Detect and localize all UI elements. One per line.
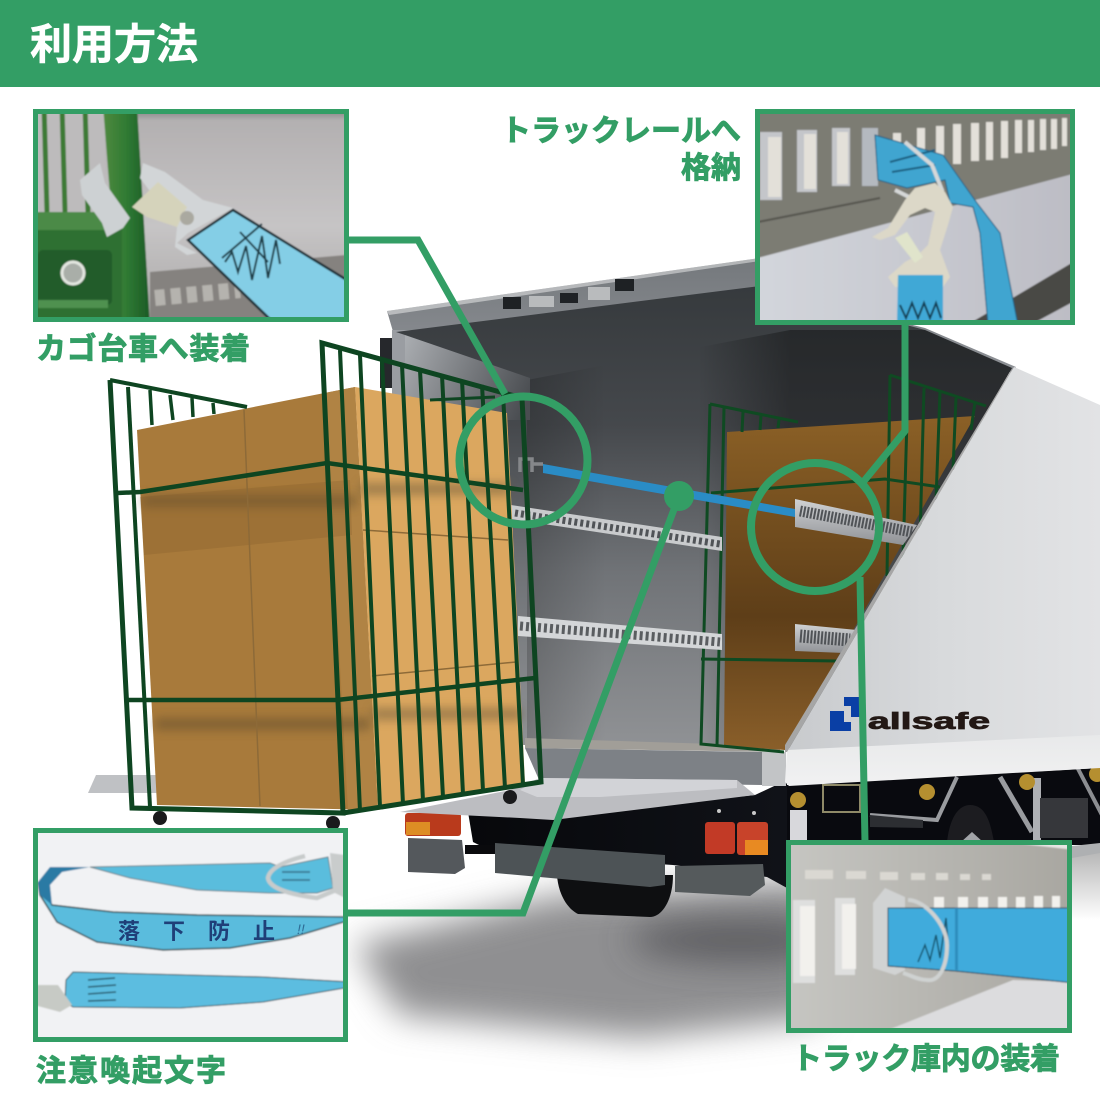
large slots — [800, 896, 1060, 976]
rear wheel — [557, 875, 673, 917]
back cage — [701, 375, 986, 752]
ground shadow — [355, 850, 1100, 1038]
snap hook — [872, 183, 953, 287]
lift gate platform — [88, 775, 755, 820]
upper small slots — [805, 870, 991, 880]
upper rail left — [511, 505, 722, 551]
lower rail left — [518, 616, 722, 650]
cage wheels — [153, 790, 517, 830]
left door post — [380, 338, 393, 388]
connector: inside-truck panel to circle — [860, 577, 865, 842]
lower strap of loop — [38, 882, 350, 950]
stitching — [918, 918, 948, 962]
rail slots — [768, 118, 1067, 197]
panel: inside truck photo — [783, 837, 1075, 1037]
right hook — [140, 163, 233, 255]
upper rail right — [795, 499, 917, 545]
tail sill — [525, 748, 762, 785]
interior floor — [525, 738, 780, 752]
lower rail right — [795, 624, 857, 653]
underside of truck — [405, 763, 1100, 917]
panel: warning text strap photo — [30, 825, 352, 1045]
interior back wall — [396, 286, 1012, 748]
lower strap piece — [65, 972, 350, 1008]
bracket — [873, 888, 905, 975]
dark floor rail — [974, 263, 1070, 320]
caption: rail storage: 格納 — [681, 152, 741, 185]
strap dot — [664, 481, 694, 511]
large slot surrounds — [793, 898, 855, 983]
strap — [888, 908, 1075, 983]
callout circle: cage attachment — [460, 396, 588, 524]
strap — [875, 135, 1018, 325]
roll cage — [110, 343, 541, 813]
d ring — [903, 900, 947, 980]
callout circle: rail attachment — [751, 463, 879, 591]
panel: warning text strap photo: !! — [297, 921, 305, 937]
back cardboard box — [724, 416, 975, 750]
bolt — [62, 262, 84, 284]
fuel tank — [675, 864, 765, 896]
roof clips — [503, 279, 634, 309]
interior left wall — [405, 335, 530, 420]
truck illustration — [88, 258, 1100, 917]
allsafe logo: allsafe — [868, 708, 990, 734]
roof strip — [387, 258, 1016, 372]
side wheel — [947, 805, 994, 842]
title: 利用方法 — [30, 21, 198, 68]
left bumper — [408, 838, 465, 874]
left hook — [80, 163, 130, 237]
connector: warning text panel to strap dot — [346, 496, 679, 913]
right tail lamp — [705, 822, 735, 854]
d ring — [268, 856, 336, 898]
printed strap text: 落下防止 — [118, 919, 298, 944]
lower hook — [38, 984, 72, 1012]
caption: cage attachment: カゴ台車へ装着 — [36, 332, 250, 366]
caption: warning text: 注意喚起文字 — [36, 1055, 226, 1088]
inside of loop — [38, 867, 90, 905]
cardboard box stack — [137, 387, 525, 810]
lower strap — [897, 275, 943, 325]
connector: cage panel to circle — [348, 240, 505, 394]
caption: rail storage: トラックレールへ — [501, 115, 741, 148]
connector: rail storage panel to circle — [864, 325, 905, 481]
header bar — [0, 0, 1100, 87]
panel: rail storage photo — [750, 105, 1080, 330]
rail slot surrounds — [760, 128, 850, 200]
stitching — [222, 224, 280, 280]
latch — [132, 182, 187, 227]
side chassis parts — [790, 810, 807, 840]
side step — [1072, 843, 1100, 858]
strap end — [188, 210, 350, 325]
left tail lamp — [405, 813, 461, 836]
underrun bar — [495, 843, 665, 887]
bracket — [862, 128, 878, 186]
side panel of truck — [787, 367, 1100, 752]
blue strap in truck — [520, 459, 795, 517]
allsafe logo — [830, 697, 990, 734]
upper strap of loop — [90, 857, 333, 893]
panel: cage attachment photo — [30, 105, 352, 325]
caption: inside truck attachment: トラック庫内の装着 — [792, 1043, 1060, 1076]
d ring — [895, 142, 942, 205]
caption: rail storage — [501, 115, 741, 185]
